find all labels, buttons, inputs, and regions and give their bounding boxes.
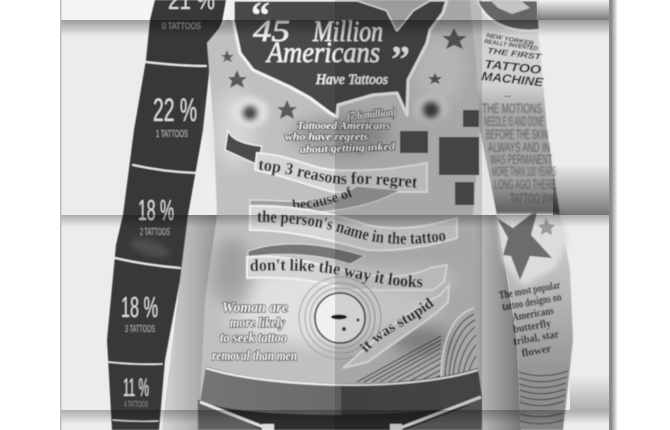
stat: 18% 3 tattoos: 3 TATTOOS: [125, 324, 155, 335]
banner: don't like the way it looks: [246, 243, 448, 292]
stat: 22% 1 tattoos: 1 TATTOOS: [156, 129, 188, 140]
stat: 21% 0 tattoos: [162, 0, 215, 31]
sleeve dense text block: [482, 100, 556, 206]
quote: 45 million Americans have tattoos: 45: [253, 13, 290, 48]
banner: top 3 reasons for regret: top 3 reasons for regret: [258, 160, 418, 190]
background gap between left arm and torso: [162, 130, 220, 430]
stat: 22% 1 tattoos: [153, 92, 197, 140]
icon: dark squares: [400, 110, 479, 205]
callout: women more likely to seek removal: [212, 300, 297, 363]
right arm sleeve: LONG AGO THERE: [494, 176, 556, 192]
underwear waistband: [198, 366, 482, 430]
right arm sleeve: NEEDLE IS AND DONE: [484, 113, 544, 129]
arm dividers: [108, 62, 206, 421]
sleeve text: most popular tattoo designs: [498, 279, 572, 362]
icon: stars: [221, 28, 467, 119]
sleeve text: most popular tattoo designs: tribal, star: [512, 328, 560, 348]
navel circle: [299, 277, 381, 359]
callout: 7.6 million tattooed Americans with regrets: [285, 107, 397, 156]
banner: because of: [249, 186, 398, 212]
banner: it was stupid: [342, 283, 450, 370]
banner: the person's name in the tattoo: the person's name in the tattoo: [256, 210, 446, 245]
callout: women more likely to seek removal: to seek tattoo: [220, 330, 287, 345]
sleeve dense text block: WAS PERMANENT: [490, 151, 552, 167]
sleeve dense text block: TATTOO INK: [510, 190, 555, 206]
icon: large star: [497, 209, 552, 280]
quote: 45 million Americans have tattoos: ”: [391, 39, 410, 81]
sleeve text: most popular tattoo designs: Americans: [511, 305, 555, 324]
sleeve dense text block: BEFORE THE SKIN: [486, 126, 548, 142]
sleeve top text: new yorker: TATTOO: [484, 57, 543, 77]
banner: top 3 reasons for regret: [224, 130, 428, 194]
sleeve top text: new yorker: THE FIRST: [487, 46, 543, 62]
stat: 11% 4 tattoos: 4 TATTOOS: [124, 400, 148, 409]
waves tattoo on hip: [357, 308, 476, 382]
left arm: tattoo percentage bars: [107, 0, 226, 430]
callout: 7.6 million tattooed Americans with regrets: Tattooed Americans: [297, 121, 390, 132]
shoulder circle tattoo: [477, 0, 540, 31]
stat: 18% 2 tattoos: 2 TATTOOS: [140, 227, 170, 238]
neck highlight streak: [226, 0, 240, 20]
sleeve text: most popular tattoo designs: flower: [521, 343, 552, 360]
banner: it was stupid: it was stupid: [359, 297, 435, 353]
callout: women more likely to seek removal: Woman are: [222, 300, 288, 316]
callout: women more likely to seek removal: more likely: [230, 315, 286, 330]
callout: 7.6 million tattooed Americans with regrets: about getting inked: [300, 142, 396, 156]
sleeve top text: new yorker: MACHINE: [481, 69, 545, 90]
right arm sleeve: [470, 0, 573, 430]
great lakes land notch: [357, 0, 430, 30]
stat: 18% 3 tattoos: 18 %: [121, 292, 158, 324]
stat: 21% 0 tattoos: 0 TATTOOS: [162, 21, 201, 31]
callout: 7.6 million tattooed Americans with regrets: (7.6 million): [346, 107, 397, 123]
chest details and stars: [221, 28, 479, 205]
stat: 18% 2 tattoos: 18 %: [138, 195, 174, 227]
quote: 45 million Americans have tattoos: [251, 0, 410, 88]
stat: 18% 2 tattoos: [138, 195, 174, 238]
callout: women more likely to seek removal: removal than men: [212, 348, 297, 363]
star halo: [497, 215, 568, 286]
quote: 45 million Americans have tattoos: Americans: [265, 36, 380, 69]
sleeve top text: new yorker: REALLY INVENTED: [484, 39, 539, 53]
left arm: tattoo percentage bars: 11 %: [123, 374, 149, 402]
banner: because of: because of: [292, 186, 353, 209]
callout: 7.6 million tattooed Americans with regrets: who have regrets: [285, 132, 368, 143]
background gap between torso and right arm: [470, 125, 521, 430]
quote: 45 million Americans have tattoos: Million: [312, 15, 383, 48]
forearm rings: [519, 371, 568, 424]
quote: 45 million Americans have tattoos: Have Tattoos: [315, 72, 388, 88]
sleeve dense text block: ALWAYS AND IN: [488, 139, 550, 155]
stat: 22% 1 tattoos: 22 %: [153, 92, 197, 128]
sleeve dense text block: THE MOTIONS: [482, 100, 542, 116]
sleeve top text: new yorker: ...: [504, 90, 511, 99]
map of the USA: [233, 0, 447, 117]
banner: don't like the way it looks: don't like the way it looks: [250, 258, 423, 288]
torso: [198, 0, 482, 430]
sleeve text: most popular tattoo designs: The most popular: [498, 279, 561, 302]
sleeve text: most popular tattoo designs: butterfly: [512, 317, 552, 336]
sleeve top text: new yorker: NEW YORKER: [486, 33, 535, 47]
infographic: folded poster of tattooed torso: MORE THAN 100 YEARS: [492, 163, 556, 179]
stat: 18% 3 tattoos: [121, 292, 158, 335]
stat: 11% 4 tattoos: [123, 374, 149, 409]
sleeve top text: new yorker: [481, 33, 545, 99]
sleeve text: most popular tattoo designs: tattoo designs on: [501, 291, 562, 313]
icon: small star on arm: [538, 218, 555, 235]
